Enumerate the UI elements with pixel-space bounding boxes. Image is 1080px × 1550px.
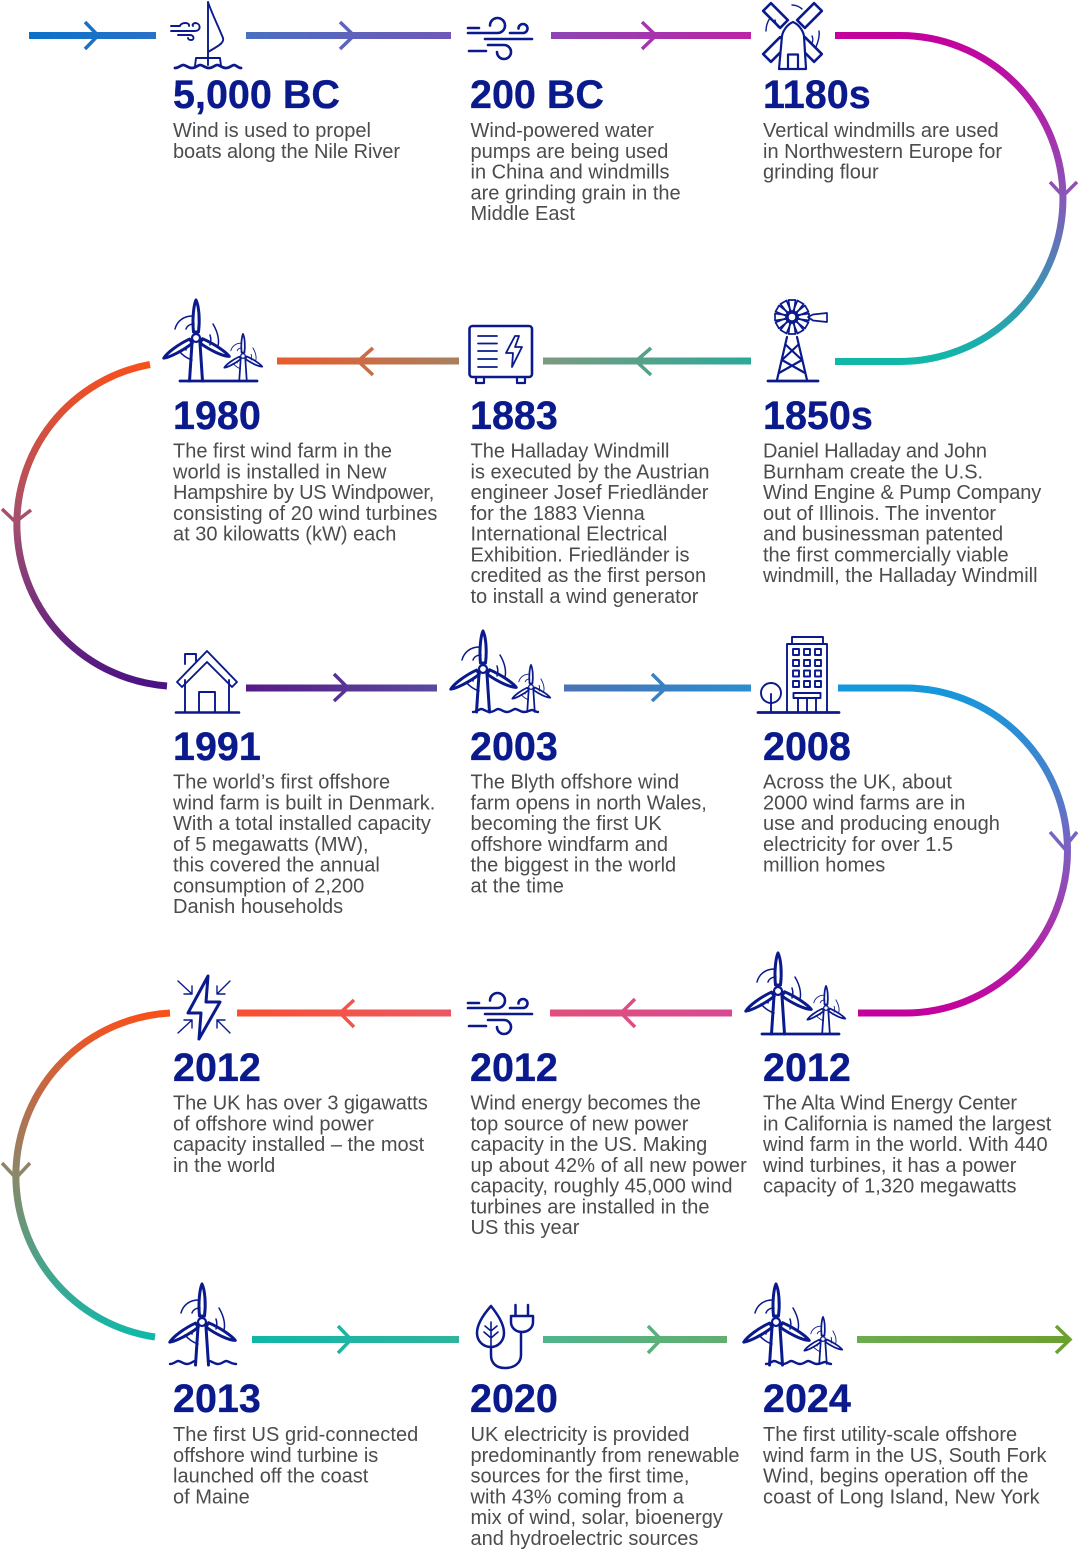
year: 2020 — [470, 1377, 558, 1421]
description: credited as the first person — [470, 565, 706, 587]
timeline row 1 — [29, 22, 751, 49]
description: of offshore wind power — [173, 1113, 374, 1135]
icon: water-pumping windmill — [768, 300, 827, 381]
description: Wind, begins operation off the — [763, 1466, 1028, 1488]
arrow — [334, 674, 348, 701]
description: the first commercially viable — [763, 544, 1009, 566]
year: 2008 — [763, 725, 851, 769]
description: top source of new power — [470, 1113, 689, 1135]
line segment — [252, 1336, 459, 1343]
line segment — [551, 32, 751, 39]
year: 2012 — [470, 1046, 558, 1090]
description: Wind Engine & Pump Company — [763, 482, 1041, 504]
description: Daniel Halladay and John — [763, 440, 987, 462]
description: consisting of 20 wind turbines — [173, 503, 437, 525]
description: Exhibition. Friedländer is — [470, 544, 690, 566]
year: 2012 — [173, 1046, 261, 1090]
description: International Electrical — [470, 524, 667, 546]
description: Burnham create the U.S. — [763, 461, 983, 483]
description: The first wind farm in the — [173, 440, 392, 462]
description: in the world — [173, 1155, 275, 1177]
year: 5,000 BC — [173, 73, 340, 117]
timeline row 3 — [246, 674, 751, 701]
icon: wind turbines — [744, 953, 846, 1034]
year: 2024 — [763, 1377, 851, 1421]
milestone: 2013 — [168, 1284, 418, 1508]
arrow — [338, 1326, 351, 1353]
description: world is installed in New — [172, 461, 387, 483]
arrow — [340, 22, 354, 49]
description: for the 1883 Vienna — [470, 503, 646, 525]
milestone: 2003 — [449, 631, 707, 897]
description: this covered the annual — [173, 854, 380, 876]
description: becoming the first UK — [470, 813, 662, 835]
description: use and producing enough — [763, 813, 1000, 835]
milestone: 5,000 BC — [171, 2, 400, 163]
milestone: 2012 Alta — [744, 953, 1052, 1198]
line segment — [277, 358, 459, 364]
description: electricity for over 1.5 — [763, 834, 953, 856]
description: the biggest in the world — [470, 854, 676, 876]
description: out of Illinois. The inventor — [763, 503, 996, 525]
description: The first utility-scale offshore — [763, 1424, 1017, 1446]
arrow — [1050, 832, 1077, 848]
line segment — [564, 684, 751, 692]
description: Middle East — [470, 203, 575, 225]
description: at 30 kilowatts (kW) each — [173, 524, 396, 546]
year: 2012 — [763, 1046, 851, 1090]
description: in China and windmills — [470, 162, 669, 184]
description: capacity, roughly 45,000 wind — [470, 1176, 733, 1198]
description: consumption of 2,200 — [173, 875, 364, 897]
description: with 43% coming from a — [470, 1486, 685, 1508]
arrow — [85, 22, 98, 49]
description: capacity in the US. Making — [470, 1134, 707, 1156]
line segment — [237, 1010, 451, 1016]
description: wind farm in the world. With 440 — [762, 1134, 1048, 1156]
description: Wind energy becomes the — [470, 1092, 701, 1114]
milestone: 2012 UK — [173, 976, 428, 1177]
curve: left turn 1 — [2, 364, 167, 686]
description: is executed by the Austrian — [470, 461, 710, 483]
description: turbines are installed in the — [470, 1196, 710, 1218]
description: 2000 wind farms are in — [763, 792, 965, 814]
description: to install a wind generator — [470, 586, 699, 608]
curve: right turn 1 — [835, 36, 1077, 362]
icon: offshore wind turbines — [742, 1284, 843, 1365]
description: The world’s first offshore — [173, 772, 390, 794]
year: 1991 — [173, 725, 261, 769]
description: The UK has over 3 gigawatts — [173, 1092, 428, 1114]
icon: offshore wind turbine — [168, 1284, 237, 1365]
description: The Alta Wind Energy Center — [763, 1092, 1017, 1114]
icon: wind — [468, 18, 532, 59]
description: Across the UK, about — [763, 772, 952, 794]
description: Danish households — [173, 896, 343, 918]
description: boats along the Nile River — [173, 141, 400, 163]
description: The Blyth offshore wind — [470, 772, 679, 794]
icon: offshore wind turbines — [449, 631, 551, 712]
arrow — [652, 674, 666, 701]
timeline row 5 — [252, 1326, 1070, 1353]
milestone: 1980 — [162, 300, 437, 546]
description: wind farm is built in Denmark. — [172, 792, 435, 814]
arrow — [2, 509, 31, 522]
description: sources for the first time, — [470, 1466, 689, 1488]
description: are grinding grain in the — [470, 182, 681, 204]
arrow — [1050, 182, 1077, 196]
icon: lightning bolt — [178, 976, 230, 1039]
line segment — [857, 1336, 1069, 1343]
milestone: 1180s — [763, 3, 1002, 183]
description: million homes — [763, 854, 885, 876]
year: 1850s — [763, 394, 873, 438]
icon: windmill — [763, 3, 822, 69]
arrow — [1056, 1326, 1070, 1353]
description: capacity installed – the most — [173, 1134, 425, 1156]
description: windmill, the Halladay Windmill — [762, 565, 1038, 587]
arrow — [358, 348, 373, 375]
description: at the time — [470, 875, 564, 897]
line segment — [543, 358, 751, 364]
description: Hampshire by US Windpower, — [173, 482, 434, 504]
arrow — [621, 999, 635, 1027]
milestone: 1991 — [172, 651, 435, 918]
icon: generator — [470, 326, 532, 383]
description: predominantly from renewable — [470, 1445, 740, 1467]
description: in California is named the largest — [763, 1113, 1052, 1135]
line segment — [246, 32, 451, 39]
description: wind farm in the US, South Fork — [762, 1445, 1047, 1467]
milestone: 1850s — [762, 300, 1041, 587]
icon: building and tree — [758, 637, 839, 712]
description: and hydroelectric sources — [470, 1528, 698, 1550]
icon: wind turbines — [162, 300, 263, 381]
arrow — [636, 348, 651, 375]
line segment — [543, 1336, 727, 1343]
line segment — [29, 32, 156, 39]
description: coast of Long Island, New York — [763, 1486, 1041, 1508]
line segment — [246, 684, 437, 692]
milestone: 2024 — [742, 1284, 1047, 1508]
description: UK electricity is provided — [470, 1424, 689, 1446]
description: engineer Josef Friedländer — [470, 482, 709, 504]
description: wind turbines, it has a power — [762, 1155, 1017, 1177]
description: offshore wind turbine is — [173, 1445, 378, 1467]
timeline row 2 — [277, 348, 751, 375]
milestone: 2008 — [758, 637, 1000, 876]
description: mix of wind, solar, bioenergy — [470, 1507, 723, 1529]
arrow — [2, 1163, 30, 1178]
line segment — [550, 1010, 732, 1016]
description: farm opens in north Wales, — [470, 792, 707, 814]
curve: left turn 2 — [2, 1013, 170, 1337]
year: 200 BC — [470, 73, 604, 117]
description: of Maine — [173, 1486, 250, 1508]
description: of 5 megawatts (MW), — [173, 834, 369, 856]
description: capacity of 1,320 megawatts — [763, 1176, 1016, 1198]
description: launched off the coast — [173, 1466, 369, 1488]
milestone: 2012 US — [468, 993, 747, 1239]
year: 1180s — [763, 73, 871, 117]
year: 2003 — [470, 725, 558, 769]
arrow — [648, 1326, 661, 1353]
icon: wind — [468, 993, 532, 1034]
description: Wind is used to propel — [173, 120, 371, 142]
arrow — [340, 1000, 354, 1027]
icon: house — [176, 651, 239, 712]
milestone: 1883 — [470, 326, 710, 608]
description: Vertical windmills are used — [763, 120, 999, 142]
icon: leaf and plug — [477, 1305, 533, 1368]
year: 2013 — [173, 1377, 261, 1421]
description: and businessman patented — [763, 524, 1003, 546]
year: 1883 — [470, 394, 558, 438]
milestone: 200 BC — [468, 18, 681, 225]
description: in Northwestern Europe for — [763, 141, 1002, 163]
description: US this year — [470, 1217, 580, 1239]
description: The first US grid-connected — [173, 1424, 418, 1446]
curve: right turn 2 — [838, 688, 1077, 1013]
description: pumps are being used — [470, 141, 668, 163]
description: Wind-powered water — [470, 120, 654, 142]
timeline row 4 — [237, 999, 732, 1027]
description: The Halladay Windmill — [470, 440, 669, 462]
milestone: 2020 — [470, 1305, 740, 1550]
description: up about 42% of all new power — [470, 1155, 747, 1177]
icon: sailboat — [171, 2, 241, 68]
description: grinding flour — [763, 162, 879, 184]
description: With a total installed capacity — [173, 813, 431, 835]
arrow — [642, 22, 656, 49]
description: offshore windfarm and — [470, 834, 668, 856]
year: 1980 — [173, 394, 261, 438]
